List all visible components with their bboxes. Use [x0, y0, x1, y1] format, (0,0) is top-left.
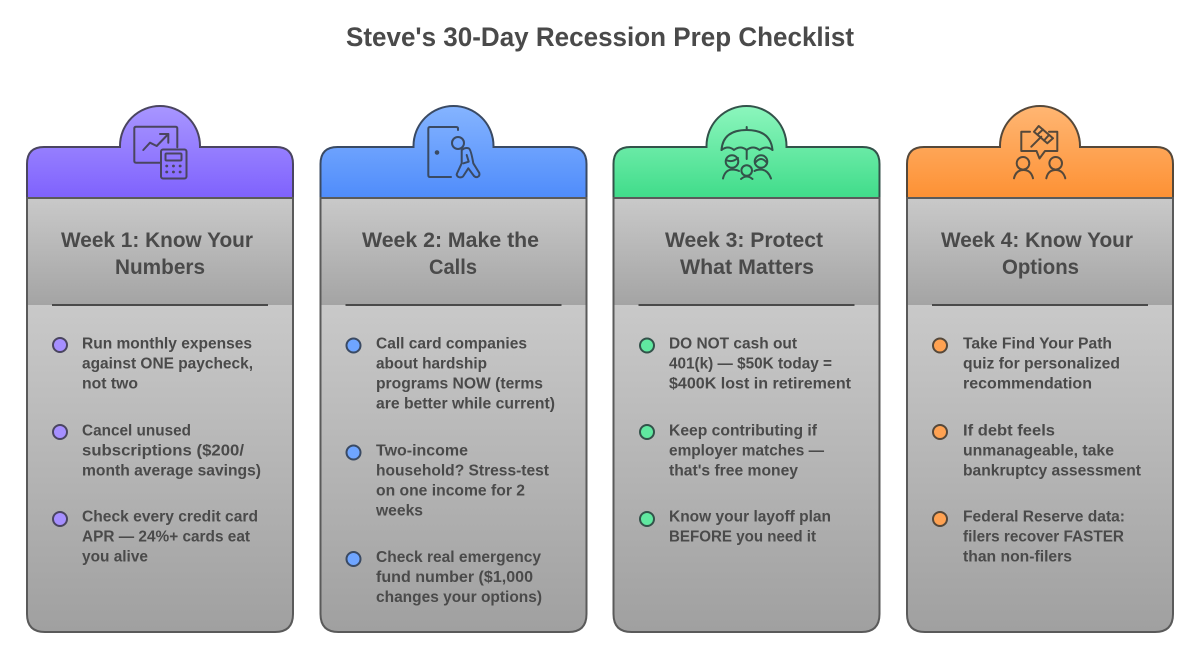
icon: gavel and two people [1014, 126, 1065, 178]
header tab: week 4 [907, 106, 1173, 198]
bullet: week 3 item 2: that's free money [669, 462, 798, 480]
icon: chart and calculator [134, 127, 186, 178]
heading: week 2: Calls [429, 255, 477, 279]
divider: week 2 [346, 304, 562, 306]
bullet: week 4 item 2: bankruptcy assessment [963, 462, 1142, 480]
card outline: week 4 [907, 198, 1173, 632]
panel: week 3 [614, 106, 880, 632]
bullet: week 1 item 2: month average savings) [82, 462, 261, 480]
heading band: week 2 [320, 198, 586, 305]
bullet: week 3 item 1 [640, 336, 852, 392]
bullet: week 4 item 3: Federal Reserve data: [963, 508, 1125, 526]
bullet: week 1 item 3: you alive [82, 548, 148, 566]
bullet: week 1 item 1: Run monthly expenses [82, 336, 252, 352]
body: week 2 [320, 305, 586, 632]
bullet: week 3 item 3: BEFORE you need it [669, 528, 817, 546]
bullet: week 1 item 3: Check every credit card [82, 508, 258, 526]
bullet: week 3 item 2: employer matches — [669, 442, 824, 460]
bullet: week 2 item 2: on one income for 2 [376, 482, 525, 500]
heading band: week 1 [27, 198, 293, 305]
bullet: week 2 item 1: programs NOW (terms [376, 376, 543, 392]
bullet: week 2 item 2: Two-income [376, 442, 468, 460]
bullet: week 1 item 3 [53, 508, 258, 566]
bullet: week 2 item 1: about hardship [376, 356, 487, 372]
bullet: week 2 item 2: household? Stress-test [376, 462, 550, 480]
bullet: week 2 item 1 [346, 336, 555, 412]
heading: week 4 [941, 228, 1134, 279]
body: week 3 [614, 305, 880, 632]
heading: week 3 [665, 228, 823, 279]
bullet: week 2 item 1: Call card companies [376, 336, 527, 352]
panel: week 2 [320, 106, 586, 632]
bullet: week 4 item 1: recommendation [963, 376, 1092, 392]
bullet: week 4 item 1: Take Find Your Path [963, 336, 1112, 352]
bullet: week 1 item 2: subscriptions ($200/ [82, 442, 245, 460]
bullet: week 4 item 1: quiz for personalized [963, 356, 1120, 372]
bullet: week 2 item 1: are better while current) [376, 396, 555, 412]
bullet: week 1 item 1: against ONE paycheck, [82, 356, 253, 372]
bullet: week 4 item 1 [933, 336, 1120, 392]
card outline: week 2 [320, 198, 586, 632]
heading: week 2 [362, 228, 539, 279]
icon: umbrella over family [722, 127, 772, 179]
header tab: week 1 [27, 106, 293, 198]
heading band: week 3 [614, 198, 880, 305]
icon: person leaving through door [428, 127, 479, 177]
body: week 4 [907, 305, 1173, 632]
bullet: week 3 item 1: 401(k) — $50K today = [669, 356, 832, 372]
bullet: week 1 item 1: not two [82, 376, 138, 392]
bullet: week 3 item 3: Know your layoff plan [669, 508, 831, 526]
heading: week 4: Options [1002, 255, 1079, 279]
bullet: week 3 item 3 [640, 508, 831, 546]
bullet: week 2 item 2: weeks [375, 502, 423, 520]
bullet: week 1 item 2 [53, 422, 261, 480]
bullet: week 4 item 2: If debt feels [963, 422, 1055, 440]
panel: week 1 [27, 106, 293, 632]
header tab: week 3 [614, 106, 880, 198]
heading: week 1 [61, 228, 254, 279]
heading: week 1: Week 1: Know Your [61, 228, 254, 252]
bullet: week 4 item 2: unmanageable, take [963, 442, 1114, 460]
header tab: week 2 [320, 106, 586, 198]
bullet: week 1 item 1 [53, 336, 253, 392]
bullet: week 2 item 3: changes your options) [376, 589, 542, 606]
heading: week 1: Numbers [115, 255, 205, 279]
bullet: week 3 item 2: Keep contributing if [669, 422, 818, 440]
divider: week 4 [932, 304, 1148, 306]
bullet: week 2 item 2 [346, 442, 550, 520]
bullet: week 4 item 3 [933, 508, 1125, 566]
heading: week 4: Week 4: Know Your [941, 228, 1134, 252]
heading: week 3: What Matters [680, 255, 814, 279]
bullet: week 4 item 3: filers recover FASTER [963, 528, 1124, 546]
bullet: week 1 item 2: Cancel unused [82, 422, 191, 440]
title: Steve's 30-Day Recession Prep Checklist [346, 22, 854, 52]
divider: week 1 [52, 304, 268, 306]
card outline: week 3 [614, 198, 880, 632]
bullet: week 1 item 3: APR — 24%+ cards eat [82, 528, 251, 546]
bullet: week 4 item 3: than non-filers [963, 548, 1072, 566]
bullet: week 2 item 3: Check real emergency [376, 549, 541, 566]
bullet: week 3 item 1: $400K lost in retirement [669, 376, 852, 392]
card outline: week 1 [27, 198, 293, 632]
bullet: week 2 item 3 [346, 549, 542, 606]
bullet: week 2 item 3: fund number ($1,000 [376, 569, 533, 586]
bullet: week 4 item 2 [933, 422, 1142, 480]
heading: week 3: Week 3: Protect [665, 228, 823, 252]
divider: week 3 [638, 304, 854, 306]
heading band: week 4 [907, 198, 1173, 305]
body: week 1 [27, 305, 293, 632]
heading: week 2: Week 2: Make the [362, 228, 539, 252]
panel: week 4 [907, 106, 1173, 632]
bullet: week 3 item 1: DO NOT cash out [669, 336, 798, 352]
bullet: week 3 item 2 [640, 422, 824, 480]
